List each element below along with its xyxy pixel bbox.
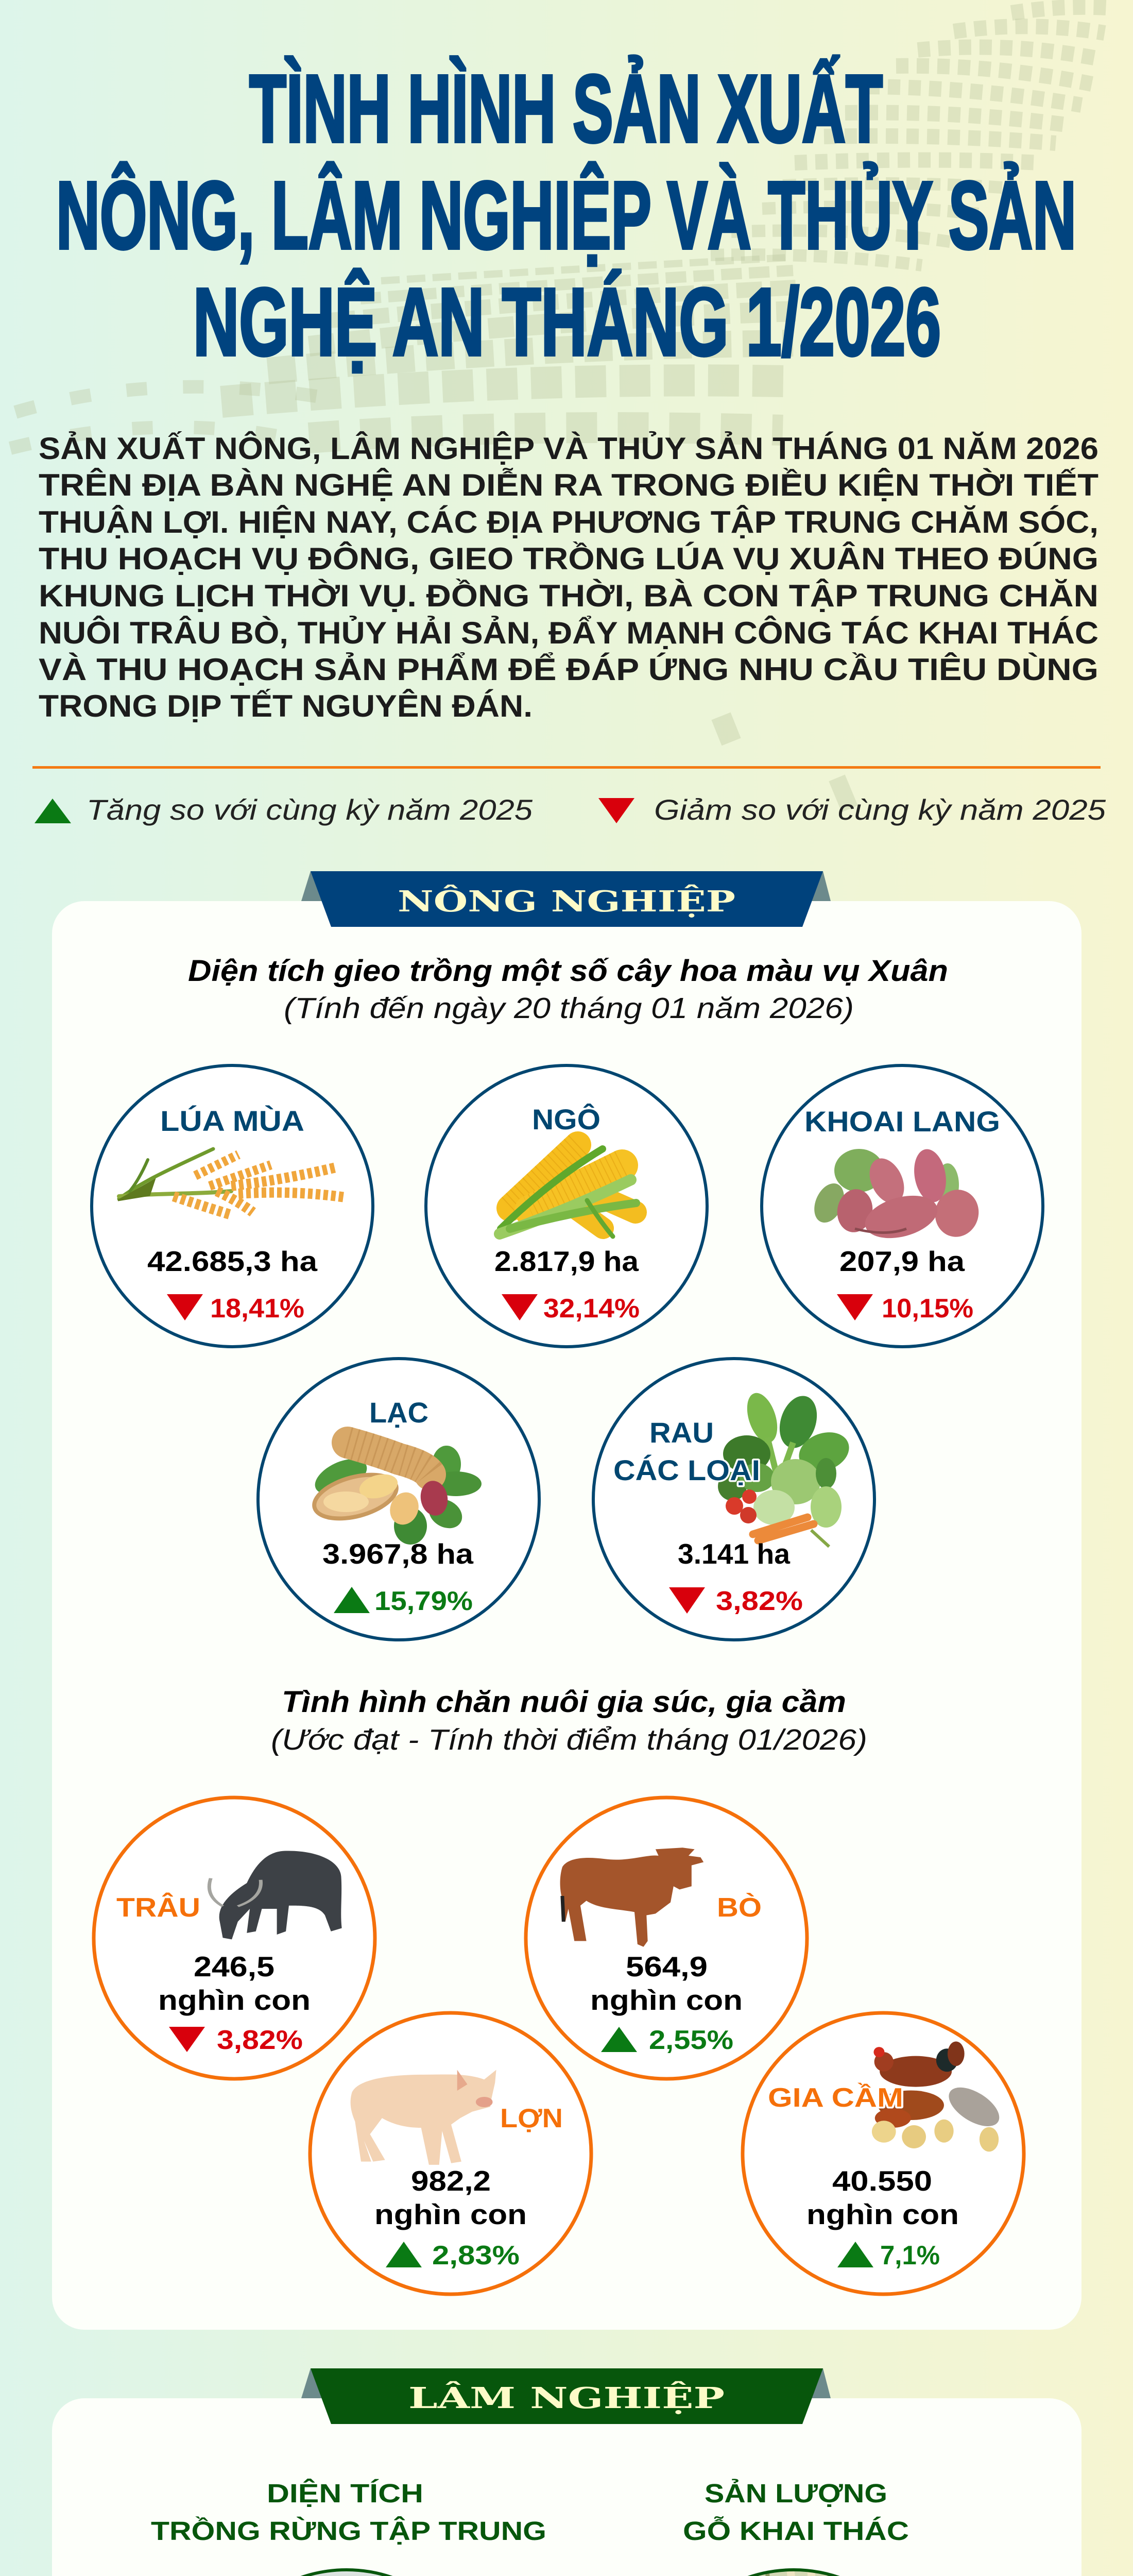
livestock: trâu: TRÂU: [116, 1892, 200, 1923]
legend: [35, 793, 1106, 826]
livestock: bò: BÒ: [717, 1893, 762, 1923]
livestock heading: [271, 1685, 867, 1756]
livestock: trâu: nghìn con: [158, 1984, 311, 2016]
banner: nông nghiệp: [301, 871, 831, 927]
livestock: trâu: [94, 1798, 375, 2079]
crop: lạc: 3.967,8 ha: [322, 1538, 473, 1570]
intro text block: THU HOẠCH VỤ ĐÔNG, GIEO TRỒNG LÚA VỤ XUÂN THEO ĐÚNG: [39, 541, 1098, 576]
icon: pig: [351, 2070, 496, 2165]
livestock heading: Tình hình chăn nuôi gia súc, gia cầm: [282, 1685, 846, 1719]
icon: sweet potato: [809, 1147, 984, 1245]
intro text block: TRÊN ĐỊA BÀN NGHỆ AN DIỄN RA TRONG ĐIỀU KIỆN THỜI TIẾT: [39, 468, 1098, 502]
intro text block: THUẬN LỢI. HIỆN NAY, CÁC ĐỊA PHƯƠNG TẬP TRUNG CHĂM SÓC,: [39, 505, 1098, 539]
icon: buffalo: [209, 1851, 342, 1939]
banner: lâm nghiệp: [301, 2368, 831, 2424]
crop: ngô: 2.817,9 ha: [494, 1245, 639, 1277]
livestock: bò: 2,55%: [649, 2025, 733, 2055]
livestock: lợn: 982,2: [411, 2165, 491, 2197]
livestock: lợn: nghìn con: [374, 2198, 527, 2230]
livestock: gia cầm: nghìn con: [806, 2198, 959, 2230]
crop heading: (Tính đến ngày 20 tháng 01 năm 2026): [284, 992, 854, 1025]
legend: Tăng so với cùng kỳ năm 2025: [87, 793, 533, 826]
crop: khoai lang: 10,15%: [882, 1294, 973, 1324]
icon: peanut: [310, 1443, 482, 1545]
icon: rice: [118, 1149, 345, 1215]
crop: rau các loại: 3,82%: [716, 1586, 803, 1616]
crop: ngô: 32,14%: [543, 1294, 640, 1324]
intro text block: KHUNG LỊCH THỜI VỤ. ĐỒNG THỜI, BÀ CON TẬP TRUNG CHĂN: [39, 579, 1098, 613]
livestock heading: (Ước đạt - Tính thời điểm tháng 01/2026): [271, 1723, 867, 1756]
crop: lúa mùa: LÚA MÙA: [160, 1105, 304, 1137]
icon: vegetables: [718, 1389, 854, 1547]
circle: timber photo: [748, 2568, 839, 2576]
heading: sản lượng gỗ: GỖ KHAI THÁC: [683, 2516, 909, 2546]
intro text block: TRONG DỊP TẾT NGUYÊN ĐÁN.: [39, 689, 533, 723]
heading: diện tích: TRỒNG RỪNG TẬP TRUNG: [151, 2516, 546, 2546]
banner: nông nghiệp: NÔNG NGHIỆP: [398, 884, 735, 919]
crop: khoai lang: KHOAI LANG: [804, 1105, 1000, 1138]
crop heading: Diện tích gieo trồng một số cây hoa màu vụ Xuân: [188, 954, 948, 988]
intro text block: SẢN XUẤT NÔNG, LÂM NGHIỆP VÀ THỦY SẢN THÁNG 01 NĂM 2026: [39, 431, 1098, 466]
crop: lạc: LẠC: [369, 1396, 428, 1429]
title: [56, 56, 1076, 376]
heading: sản lượng gỗ: SẢN LƯỢNG: [705, 2478, 887, 2508]
crop: lúa mùa: 18,41%: [210, 1294, 304, 1324]
livestock: lợn: 2,83%: [432, 2241, 520, 2270]
panel: lâm nghiệp: [52, 2368, 1082, 2576]
heading: sản lượng gỗ: [683, 2478, 909, 2546]
legend: Giảm so với cùng kỳ năm 2025: [654, 793, 1106, 826]
livestock: gia cầm: GIA CẦM: [768, 2082, 903, 2113]
banner: lâm nghiệp: LÂM NGHIỆP: [408, 2381, 725, 2415]
intro text block: [39, 431, 1098, 723]
intro text block: VÀ THU HOẠCH SẢN PHẨM ĐỂ ĐÁP ỨNG NHU CẦU TIÊU DÙNG: [39, 652, 1098, 687]
intro text block: NUÔI TRÂU BÒ, THỦY HẢI SẢN, ĐẨY MẠNH CÔNG TÁC KHAI THÁC: [39, 616, 1098, 650]
crop: lạc: 15,79%: [374, 1586, 473, 1616]
icon: poultry: [872, 2041, 1009, 2151]
crop: rau các loại: CÁC LOẠI: [613, 1454, 760, 1486]
crop: khoai lang: 207,9 ha: [839, 1245, 965, 1277]
crop: lúa mùa: 42.685,3 ha: [147, 1245, 317, 1277]
livestock: gia cầm: 40.550: [832, 2165, 932, 2197]
crop: ngô: [426, 1065, 707, 1347]
livestock: gia cầm: [743, 2013, 1024, 2294]
crop heading: [188, 954, 948, 1025]
livestock: bò: 564,9: [626, 1951, 708, 1982]
icon: cow: [560, 1848, 703, 1947]
icon: corn: [500, 1145, 636, 1236]
livestock: bò: [526, 1798, 807, 2079]
livestock: lợn: [310, 2013, 591, 2294]
crop: ngô: NGÔ: [532, 1103, 600, 1136]
heading: diện tích: [151, 2478, 546, 2546]
circle: forest photo: [301, 2568, 392, 2576]
crop: rau các loại: RAU: [649, 1416, 714, 1449]
crop: khoai lang: [762, 1065, 1043, 1347]
crop: lạc: [258, 1359, 539, 1640]
panel: nông nghiệp: [52, 871, 1082, 2330]
heading: diện tích: DIỆN TÍCH: [267, 2478, 423, 2508]
livestock: gia cầm: 7,1%: [880, 2241, 940, 2270]
livestock: trâu: 246,5: [194, 1951, 274, 1982]
crop: rau các loại: 3.141 ha: [678, 1538, 790, 1570]
livestock: lợn: LỢN: [500, 2104, 563, 2133]
crop: rau các loại: [593, 1359, 874, 1640]
livestock: bò: nghìn con: [590, 1984, 743, 2016]
crop: lúa mùa: [92, 1065, 373, 1347]
livestock: trâu: 3,82%: [217, 2025, 303, 2055]
